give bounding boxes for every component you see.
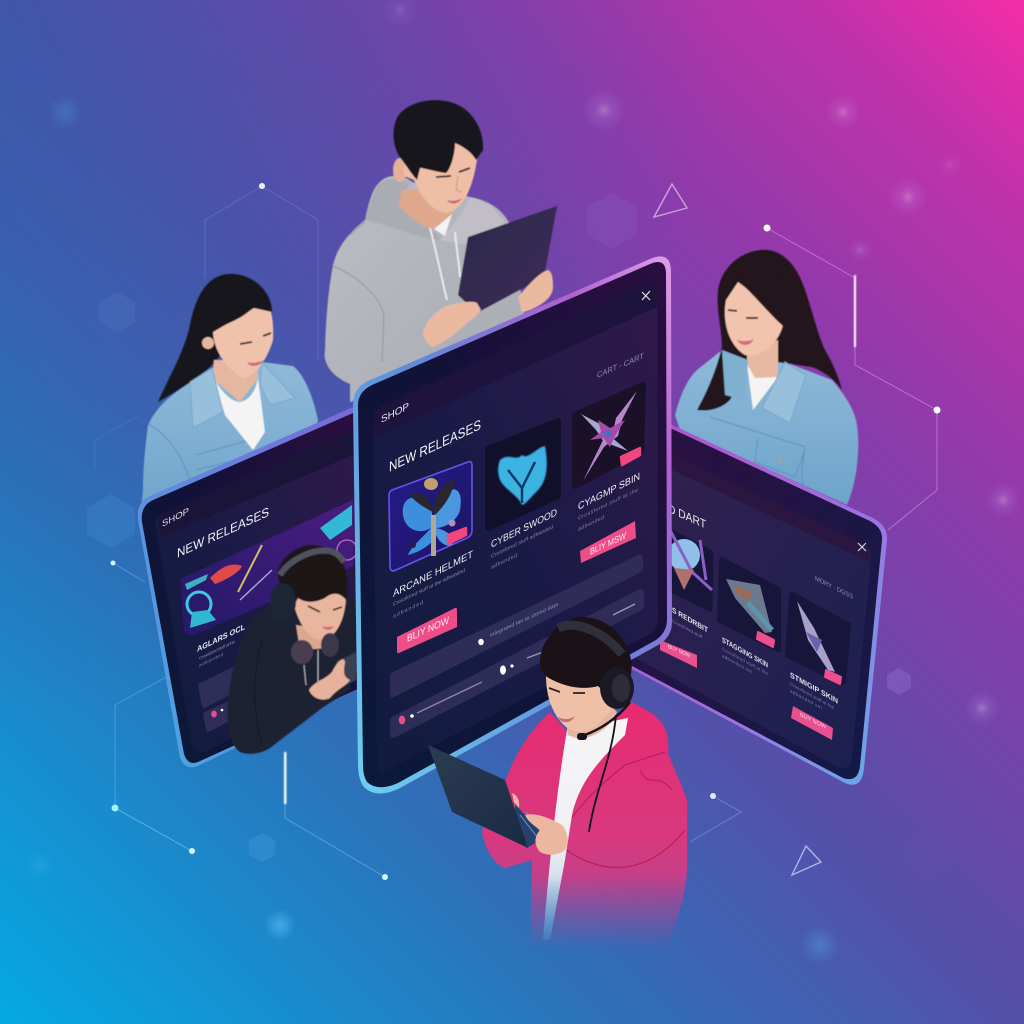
product card: dagger	[788, 595, 848, 684]
shop label: SHOP	[381, 401, 409, 426]
face	[292, 575, 346, 640]
hair	[158, 274, 272, 402]
product descriptions: Crossfored stuff at the adbanded	[393, 568, 465, 608]
product descriptions: adbanded set	[722, 653, 753, 676]
product title: AGLARS OCL	[197, 621, 245, 654]
hoodie drawstrings	[430, 228, 460, 300]
heading: D DART	[668, 501, 706, 532]
buy buttons: BUY NOW	[668, 644, 690, 660]
list row with caption	[390, 554, 643, 698]
inner screen area	[156, 428, 360, 753]
product card: star blade	[575, 385, 643, 486]
headphone band	[280, 551, 344, 575]
device and hand	[336, 652, 356, 688]
close icon	[858, 543, 866, 551]
hood collar, right side	[440, 197, 505, 245]
badge	[757, 632, 774, 647]
face	[546, 676, 612, 732]
laptop lid	[428, 745, 528, 848]
person: woman in denim jacket, left	[140, 274, 318, 520]
product description: adbanded	[199, 652, 223, 669]
shop label: SHOP	[162, 506, 189, 530]
heading: NEW RELEASES	[389, 417, 481, 476]
product descriptions: adbanded	[491, 553, 517, 571]
product descriptions: Crossfored stuff at the	[790, 681, 834, 711]
neck	[747, 340, 778, 392]
ear	[393, 158, 407, 182]
product descriptions: adbanded set	[790, 688, 823, 712]
hands	[423, 302, 481, 347]
heading: NEW RELEASES	[177, 504, 269, 561]
white tee	[747, 364, 778, 410]
product labels: STAGGING SKIN	[722, 635, 768, 670]
headset ear cup	[600, 667, 634, 709]
background circuit lines and nodes	[95, 183, 940, 880]
person: student in pink hoodie with laptop	[428, 617, 687, 950]
hoodie	[228, 590, 360, 754]
product descriptions: adbanded	[578, 515, 604, 533]
product description: Crossfored stuff at the	[199, 639, 235, 662]
list row with caption: Integrated fan to stored data	[490, 601, 559, 639]
header band	[640, 440, 870, 562]
laptop keyboard	[514, 805, 540, 848]
badge	[825, 670, 841, 684]
face	[404, 135, 478, 213]
buy buttons: BLIY MSW	[590, 530, 626, 558]
close icon	[642, 291, 650, 300]
list row with progress slider	[390, 589, 644, 738]
decorative triangles and hexagons	[87, 184, 949, 879]
person: gamer in dark hoodie with headphones	[228, 545, 360, 754]
face	[725, 282, 783, 355]
screen edge	[353, 256, 672, 794]
list rows	[200, 666, 240, 706]
hair front	[737, 268, 795, 329]
neck	[296, 625, 330, 650]
headset microphone	[582, 702, 630, 736]
product titles: CYBER SWOOD	[491, 506, 557, 551]
product labels: STMIGIP SKIN	[790, 670, 838, 706]
product titles: CYAGMP SBIN	[578, 471, 640, 513]
hair	[278, 545, 347, 610]
hoodie	[482, 702, 687, 950]
cart links: MORY · DGSS	[815, 575, 853, 601]
buy buttons	[660, 640, 833, 740]
headset band	[558, 625, 622, 654]
badge	[621, 448, 640, 465]
white tee	[543, 718, 628, 940]
buy buttons	[397, 521, 636, 653]
panel: right shop screen	[630, 410, 887, 785]
product descriptions	[672, 618, 834, 712]
product titles	[393, 471, 640, 600]
product card: ship	[720, 560, 778, 649]
cart links: CART - CART	[597, 351, 644, 380]
product descriptions: Crossfored stuff adbanded	[491, 524, 553, 560]
inner screen area	[630, 440, 871, 768]
neck	[566, 708, 617, 738]
header band	[373, 282, 657, 437]
person: woman in denim jacket, right	[675, 250, 858, 505]
product labels	[672, 606, 838, 706]
screen body	[358, 262, 667, 787]
hand	[525, 814, 568, 855]
product descriptions: Crossfored stuff at the	[578, 487, 638, 522]
buy buttons: BLIY NOW	[407, 615, 449, 645]
inner screen area	[373, 282, 658, 771]
face	[213, 308, 273, 378]
product descriptions: Crossfored stuff at the	[722, 646, 768, 677]
panel: left shop screen	[138, 404, 360, 767]
product labels: S REDRBIT	[672, 606, 708, 635]
white tee collar	[434, 214, 452, 236]
hair	[540, 616, 632, 688]
hair	[393, 100, 483, 180]
product descriptions: Crossfored stuff	[672, 618, 703, 641]
header band	[158, 428, 360, 537]
ear cup	[270, 583, 296, 621]
headset cable	[589, 715, 616, 832]
hair fringe	[207, 276, 272, 335]
skin: neck	[398, 190, 452, 230]
badge	[448, 528, 466, 544]
product titles: ARCANE HELMET	[393, 548, 473, 600]
hair	[697, 250, 842, 411]
buy buttons: BUY NOW	[800, 712, 826, 731]
product card: arcane helmet	[389, 462, 472, 571]
product card: cyber sword	[488, 421, 558, 528]
featured banner	[182, 502, 357, 634]
person: man in grey hoodie with tablet	[325, 100, 557, 402]
jacket collars	[190, 368, 223, 428]
neck headphones	[291, 640, 313, 664]
panel: centre shop screen	[353, 256, 672, 794]
tablet	[458, 206, 557, 313]
product descriptions	[393, 487, 638, 620]
neck	[212, 360, 258, 402]
white tee	[212, 374, 265, 450]
product descriptions: adbanded	[393, 600, 423, 620]
product card: satellite	[650, 520, 712, 609]
jacket collar	[762, 362, 806, 423]
